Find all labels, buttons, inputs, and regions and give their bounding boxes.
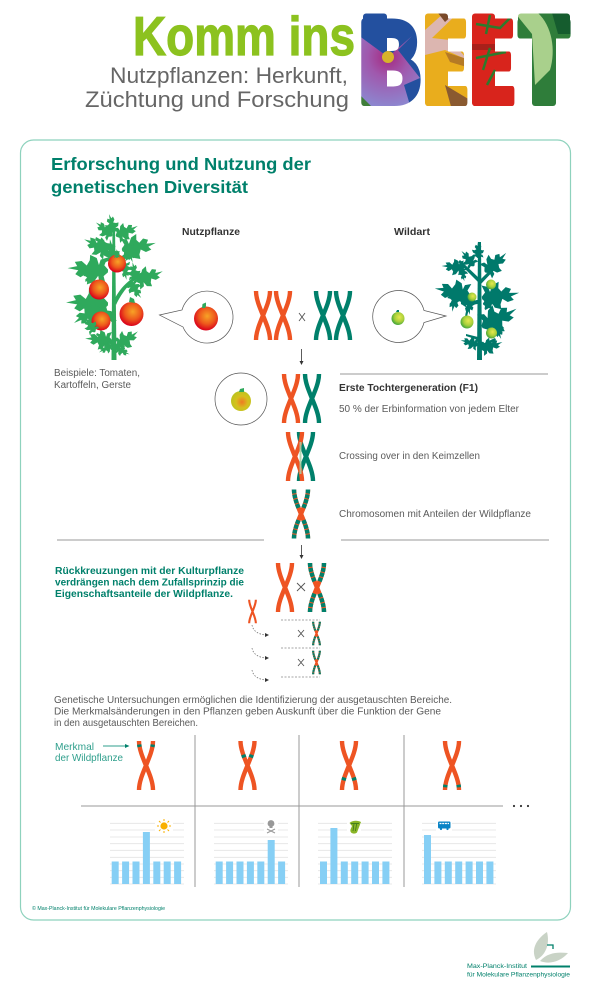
bar chart: taste — [318, 819, 392, 884]
F1 description block: Chromosomen mit Anteilen der Wildpflanze — [339, 509, 531, 520]
callout: wild fruit — [373, 291, 446, 343]
photo-filled word BEET — [358, 0, 570, 128]
genetic analysis paragraph: Die Merkmalsänderungen in den Pflanzen geben Auskunft über die Funktion der Gene — [54, 706, 441, 718]
panel heading: Erforschung und Nutzung der — [51, 154, 311, 174]
header title — [85, 0, 570, 128]
label: Merkmal der Wildpflanze: Merkmal — [55, 741, 94, 753]
arrow: to backcross — [300, 545, 304, 559]
variant chromosome 2 — [240, 741, 254, 790]
bar chart: sunlight — [110, 818, 184, 884]
backcross generations — [281, 620, 320, 677]
logo: Max-Planck-Institut: für Molekulare Pflanzenphysiologie — [467, 972, 570, 978]
variant chromosome 3 — [342, 741, 356, 790]
callout: F1 fruit — [215, 373, 267, 425]
logo: Max-Planck-Institut: Max-Planck-Institut — [467, 963, 527, 970]
F1 description block: Crossing over in den Keimzellen — [339, 451, 480, 462]
ellipsis dots — [513, 805, 529, 807]
variant chromosome 1 — [139, 741, 153, 790]
genetic analysis paragraph: Genetische Untersuchungen ermöglichen die Identifizierung der ausgetauschten Bereiche. — [54, 695, 452, 706]
crossing-over chromosomes — [288, 432, 313, 481]
icon: sun — [155, 818, 173, 834]
icon: cultivated tomato plant — [65, 212, 166, 360]
callout: cultivated fruit — [160, 291, 233, 343]
logo: Max-Planck-Institut — [467, 932, 570, 978]
examples text: Beispiele: Tomaten, — [54, 368, 140, 379]
copyright note: © Max-Planck-Institut für Molekulare Pflanzenphysiologie — [32, 905, 165, 912]
panel heading: genetischen Diversität — [51, 177, 248, 197]
F1 description block: Erste Tochtergeneration (F1) — [339, 383, 478, 394]
rule above F1 — [340, 373, 548, 375]
label: Merkmal der Wildpflanze — [55, 741, 130, 764]
photo-filled word BEET: B — [358, 0, 422, 128]
icon: bus — [436, 820, 452, 832]
headline: Komm ins: Komm ins — [133, 5, 355, 67]
dashed curved arrows — [252, 625, 269, 682]
arrow: to F1 — [300, 349, 304, 365]
F1 chromosomes — [284, 374, 319, 423]
photo-filled word BEET: E — [470, 0, 515, 128]
backcross description: Rückkreuzungen mit der Kulturpflanze — [55, 565, 244, 577]
backcross description: Eigenschaftsanteile der Wildpflanze. — [55, 588, 233, 600]
F1 description block — [339, 383, 531, 520]
icon: wild tomato plant — [432, 242, 523, 360]
main panel frame — [20, 140, 570, 920]
subtitle: Nutzpflanzen: Herkunft, — [110, 63, 348, 88]
label: Wildart: Wildart — [394, 227, 431, 238]
banded recombinant chromosome — [294, 490, 308, 538]
genetic analysis paragraph — [54, 695, 452, 729]
parental chromosomes: orange x green — [256, 291, 350, 340]
small gamete chromosome — [249, 600, 256, 623]
variant chromosome 4 — [445, 741, 459, 790]
F1 description block: 50 % der Erbinformation von jedem Elter — [339, 404, 520, 415]
subtitle: Züchtung und Forschung — [85, 87, 349, 112]
icon: skull and crossbones — [264, 818, 278, 834]
backcross description: verdrängen nach dem Zufallsprinzip die — [55, 576, 244, 588]
photo-filled word BEET: T — [519, 0, 569, 128]
subtitle — [85, 63, 349, 112]
label: Merkmal der Wildpflanze: der Wildpflanze — [55, 752, 123, 764]
examples text — [54, 368, 140, 391]
backcross chromosomes — [278, 563, 324, 612]
label: Nutzpflanze: Nutzpflanze — [182, 227, 240, 238]
panel heading — [51, 154, 311, 197]
backcross description — [55, 565, 244, 600]
bar chart: toxin — [214, 818, 288, 884]
photo-filled word BEET: E — [423, 0, 468, 128]
bar chart: transport — [422, 820, 496, 884]
examples text: Kartoffeln, Gerste — [54, 380, 131, 391]
icon: tongue — [347, 819, 361, 835]
genetic analysis paragraph: in den ausgetauschten Bereichen. — [54, 718, 198, 729]
